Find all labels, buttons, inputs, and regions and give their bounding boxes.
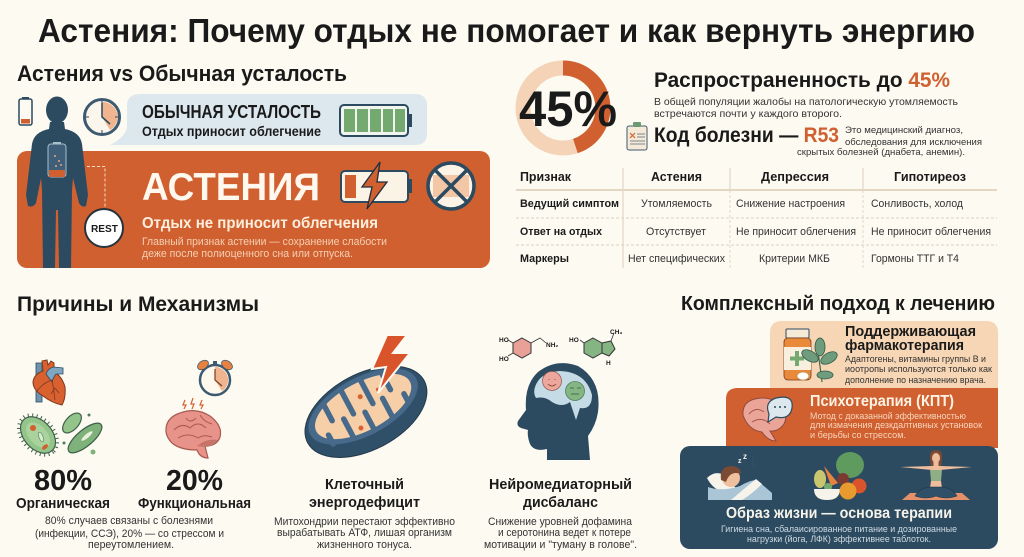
chart: 45 percent donut [519, 68, 617, 148]
stat: 80 percent organic: 80% [34, 465, 92, 497]
panel: treatment pyramid [680, 293, 998, 549]
text: code description: обследования для исключения [845, 137, 982, 148]
heading: disease code: Код болезни — R53 [654, 124, 839, 147]
text: code description [797, 125, 982, 158]
card: pharmacotherapy: дополнение по назначению врача. [845, 375, 986, 386]
panel: asthenia vs fatigue [17, 61, 490, 268]
icon: serotonin molecule: CH₃ [610, 329, 622, 336]
card: asthenia: Отдых не приносит облегчения [142, 215, 378, 232]
table row: response to rest [520, 226, 991, 238]
table row: leading symptom [520, 198, 964, 210]
icon: small low battery [19, 97, 32, 125]
text: causes description: 80% случаев связаны с болезнями [45, 515, 213, 527]
stat: 80 percent organic: Органическая [16, 495, 110, 512]
table row: markers: Маркеры [520, 253, 569, 265]
text: cellular energy deficit: Клеточный [325, 477, 404, 493]
stat: 20 percent functional [138, 465, 251, 512]
icon: serotonin molecule: H [606, 360, 611, 367]
text: prevalence description [654, 96, 959, 120]
text: code description: Это медицинский диагноз, [845, 125, 963, 136]
icon: clipboard [627, 122, 647, 150]
card: lifestyle: Образ жизни — основа терапии [726, 505, 952, 522]
card: asthenia [17, 151, 490, 268]
card: pharmacotherapy: фармакотерапия [845, 337, 964, 354]
heading: treatment: Комплексный подход к лечению [681, 293, 995, 315]
icon: head with neurotransmitters [517, 363, 599, 460]
icon: dopamine molecule [499, 337, 558, 363]
icon: stressed brain [166, 398, 221, 458]
card: psychotherapy: Психотерапия (КПТ) [810, 393, 954, 410]
text: cellular energy deficit: жизненного тонуса. [317, 539, 412, 551]
icon: sleep: z [738, 458, 742, 465]
icon: dopamine molecule: HO [499, 337, 509, 344]
text: cellular energy deficit: вырабатывать АТФ, лишая организм [277, 527, 452, 539]
card: asthenia: Главный признак астении — сохранение слабости [142, 236, 387, 248]
icon: crossed rest [428, 163, 474, 209]
table header: Депрессия [761, 169, 829, 184]
card: psychotherapy: и берьбы со стрессом. [810, 430, 906, 441]
text: causes description: (инфекции, ССЭ), 20% — со стрессом и [35, 528, 224, 540]
table row: leading symptom: Сонливость, холод [871, 198, 964, 210]
stat: 20 percent functional: Функциональная [138, 495, 251, 512]
icon: sleep: z [743, 452, 747, 461]
card: lifestyle: Гигиена сна, сбалаисированное питание и дозированные [721, 524, 957, 535]
card: ordinary fatigue [110, 94, 427, 145]
table header [520, 169, 967, 184]
icon: heart [33, 360, 65, 405]
icon: clock [84, 100, 120, 134]
icon: pill bottle and plant [784, 329, 839, 382]
card: pharmacotherapy: Адаптогены, витамины группы В и [845, 354, 986, 365]
table row: response to rest: Не приносит облегчения [736, 226, 856, 238]
card: psychotherapy: для измачения дезкдалтивных установок [810, 420, 983, 431]
text: neurotransmitter imbalance: Нейромедиаторный [489, 477, 632, 493]
stat: 80 percent organic [16, 465, 110, 512]
table row: markers: Гормоны ТТГ и Т4 [871, 253, 959, 265]
text: neurotransmitter imbalance: Снижение уровней дофамина [488, 516, 633, 528]
table row: markers: Критерии МКБ [759, 253, 830, 265]
text: neurotransmitter imbalance [484, 477, 637, 551]
panel: causes and mechanisms [11, 293, 637, 551]
text: neurotransmitter imbalance: мотивации и "туману в голове". [484, 539, 637, 551]
icon: mitochondrion [290, 347, 442, 476]
table header: Гипотиреоз [894, 169, 967, 184]
text: neurotransmitter imbalance: и серотонина ведет к потере [498, 527, 631, 539]
icon: rest badge [85, 209, 123, 247]
card: asthenia: деже после полиоценного сна или отпуска. [142, 248, 353, 260]
icon: dopamine molecule: HO [499, 356, 509, 363]
table row: leading symptom: Снижение настроения [736, 198, 845, 210]
card: pharmacotherapy: иоотропы используются только как [845, 364, 993, 375]
icon: serotonin molecule [569, 329, 622, 367]
icon: lightning bolt [372, 335, 410, 393]
table header: Признак [520, 169, 571, 184]
heading: prevalence: Распространенность до 45% [654, 69, 950, 92]
table header: Астения [651, 169, 702, 184]
text: neurotransmitter imbalance: дисбаланс [523, 495, 598, 511]
icon: person silhouette [26, 96, 88, 268]
icon: sleep [707, 451, 772, 500]
table row: leading symptom: Ведущий симптом [520, 198, 619, 210]
table row: markers: Нет специфических [628, 253, 725, 265]
icon: low battery with bolt [341, 162, 412, 209]
text: cellular energy deficit: Митохондрии перестают эффективно [274, 516, 455, 528]
card: pharmacotherapy: Поддерживающая [845, 323, 976, 340]
text: cellular energy deficit [274, 477, 455, 551]
text: causes description: переутомлением. [88, 539, 174, 551]
icon: stopwatch [196, 358, 234, 395]
icon: serotonin molecule: HO [569, 337, 579, 344]
text: cellular energy deficit: энергодефицит [309, 495, 420, 511]
icon: yoga figure [900, 450, 972, 500]
table row: markers [520, 253, 959, 265]
connector [87, 166, 105, 207]
stat: 20 percent functional: 20% [166, 465, 223, 497]
heading: asthenia vs fatigue: Астения vs Обычная усталость [17, 61, 347, 86]
table row: response to rest: Ответ на отдых [520, 226, 603, 238]
table row: response to rest: Не приносит облегчения [871, 226, 991, 238]
icon: brain with speech bubble [743, 397, 792, 441]
text: causes description [35, 515, 224, 551]
text: prevalence description: встречаются почти у каждого второго. [654, 108, 842, 120]
card: lifestyle [680, 446, 998, 549]
icon: full battery [340, 105, 412, 136]
icon: healthy food [814, 452, 866, 500]
card: asthenia: АСТЕНИЯ [142, 166, 320, 209]
icon: bacteria [11, 407, 106, 463]
heading: causes: Причины и Механизмы [17, 293, 259, 316]
card: pharmacotherapy [770, 321, 998, 390]
panel: prevalence and code [519, 68, 982, 158]
table row: leading symptom: Утомляемость [641, 198, 712, 210]
table row: response to rest: Отсутствует [646, 226, 706, 238]
icon: rest badge: REST [91, 223, 119, 235]
card: ordinary fatigue: Отдых приносит облегчение [142, 124, 321, 139]
chart: 45 percent donut: 45% [519, 81, 617, 137]
card: lifestyle: нагрузки (йога, ЛФК) эффективнее таблоток. [747, 534, 931, 545]
comparison table [516, 168, 997, 268]
text: code description: скрытых болезней (днабета, анемин). [797, 147, 965, 158]
text: prevalence description: В общей популяции жалобы на патологическую утомляемость [654, 96, 959, 108]
card: psychotherapy [726, 388, 998, 448]
icon: dopamine molecule: NH₂ [546, 342, 558, 349]
title: Астения: Почему отдых не помогает и как вернуть энергию [38, 12, 975, 49]
card: ordinary fatigue: ОБЫЧНАЯ УСТАЛОСТЬ [142, 102, 321, 122]
card: psychotherapy: Мотод с доказанной эффективностью [810, 411, 966, 422]
